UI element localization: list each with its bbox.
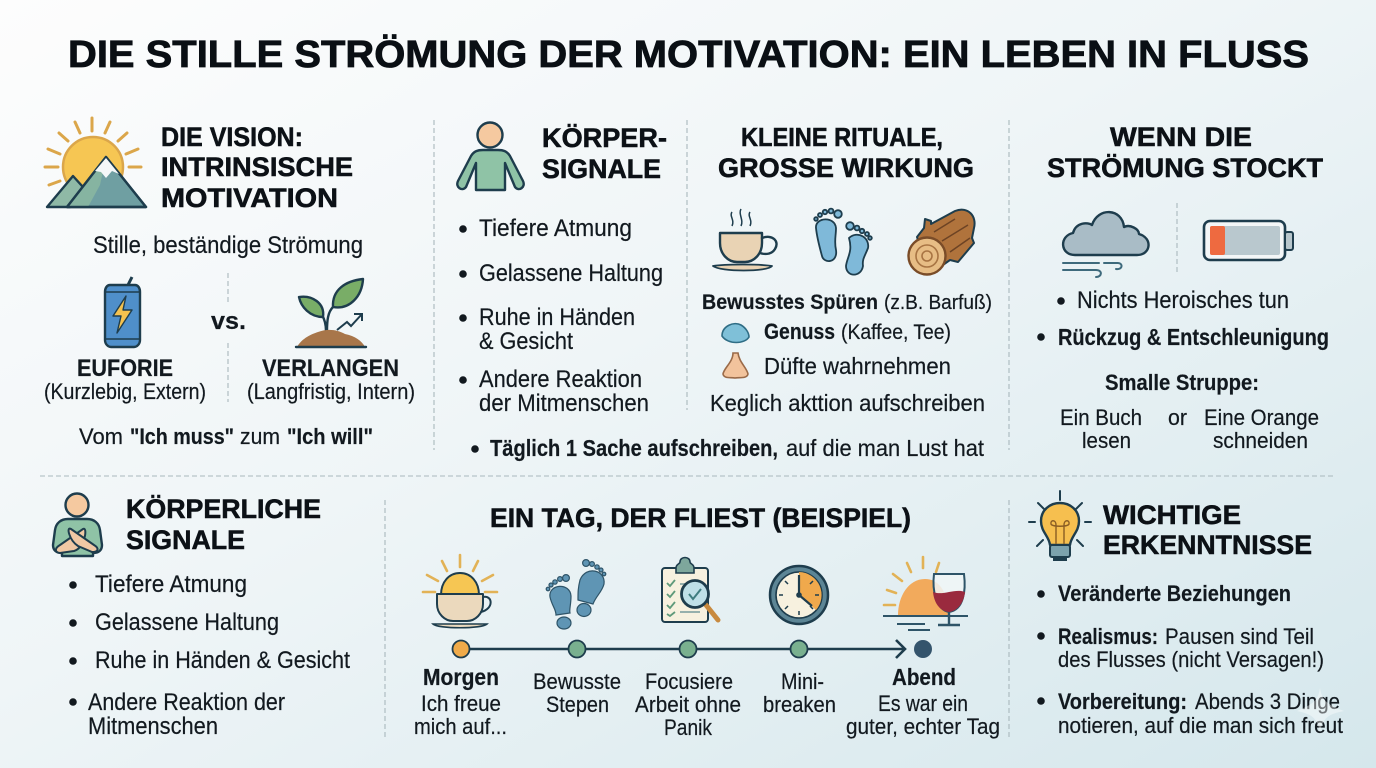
comparison: euforie: [44, 355, 206, 404]
insight: realismus: [1037, 624, 1324, 672]
heading: die vision: MOTIVATION: [161, 183, 338, 213]
subtitle: Stille, beständige Strömung: [93, 232, 363, 259]
bullet list: signals: Tiefere Atmung: [479, 215, 632, 242]
icon: light bulb: [1029, 491, 1091, 560]
heading: kleine rituale: KLEINE RITUALE,: [741, 122, 943, 152]
insight: vorbereitung: Abends 3 Dinge: [1195, 689, 1340, 714]
bullet list: signals: Ruhe in Händen: [479, 304, 635, 331]
step: morgen: Morgen: [423, 664, 499, 690]
icon: coffee cup: [713, 209, 777, 270]
comparison: verlangen: (Langfristig, Intern): [247, 379, 415, 404]
icon: low battery: [1204, 221, 1293, 260]
title: DIE STILLE STRÖMUNG DER MOTIVATION: EIN LEBEN IN FLUSS: [68, 33, 1309, 76]
heading: körpersignale: KÖRPER-: [542, 123, 667, 153]
panel: wenn die strömung stockt: [1037, 122, 1329, 453]
bullet list: rückzug: [1037, 287, 1329, 350]
panel: ein tag timeline: [414, 503, 1000, 740]
icon: shell: [722, 324, 749, 342]
icon: standing person: [457, 122, 524, 190]
heading: strömung stockt: STRÖMUNG STOCKT: [1047, 153, 1324, 183]
step: fokus arbeit: Arbeit ohne: [635, 692, 741, 717]
icon: sunset and wine glass: [883, 557, 968, 630]
closing line: "Ich will": [287, 424, 373, 449]
bullet list: signals: Gelassene Haltung: [479, 260, 663, 287]
heading: körperliche signale: KÖRPERLICHE: [126, 494, 321, 524]
vs label: vs.: [211, 308, 246, 335]
step: fokus arbeit: [635, 669, 741, 740]
insight: vorbereitung: Vorbereitung:: [1058, 689, 1187, 714]
ritual: genuss: Genuss: [764, 319, 835, 344]
panel: die vision: [44, 118, 415, 449]
heading: körpersignale: SIGNALE: [542, 154, 661, 184]
insight: realismus: Pausen sind Teil: [1165, 624, 1314, 649]
ritual: düfte: Düfte wahrnehmen: [764, 353, 951, 379]
heading: wichtige erkenntnisse: ERKENNTNISSE: [1103, 530, 1312, 560]
ritual: aufschreiben: Keglich akttion aufschreiben: [710, 390, 985, 416]
bullet list: körperliche signale: [69, 571, 350, 740]
options: buch or orange: Eine Orange: [1204, 405, 1319, 430]
bullet list: körperliche signale: Mitmenschen: [88, 713, 218, 740]
panel: körperliche signale: [53, 494, 350, 740]
insight: realismus: des Flusses (nicht Versagen!): [1058, 647, 1324, 672]
bullet list: körperliche signale: Ruhe in Händen & Gesicht: [95, 647, 350, 674]
ritual: genuss: [764, 319, 951, 344]
heading: wichtige erkenntnisse: WICHTIGE: [1103, 500, 1241, 530]
heading: die vision: INTRINSISCHE: [161, 152, 353, 182]
bullet list: signals: Andere Reaktion: [479, 366, 642, 393]
heading: wichtige erkenntnisse: [1103, 500, 1312, 560]
step: abend: Es war ein: [878, 691, 968, 716]
heading: ein tag: EIN TAG, DER FLIEST (BEISPIEL): [490, 503, 911, 533]
icon: energy can: [105, 277, 140, 347]
step: bewusste stepen: [533, 669, 621, 717]
callout: täglich 1 sache: [471, 435, 985, 461]
closing line: [79, 424, 373, 449]
step: abend: Abend: [892, 664, 956, 690]
bullet list: rückzug: Rückzug & Entschleunigung: [1058, 324, 1329, 350]
bullet list: körperliche signale: Tiefere Atmung: [95, 571, 247, 598]
step: morgen: [414, 664, 507, 739]
icon: sun and mountains: [45, 118, 146, 207]
heading: strömung stockt: WENN DIE: [1110, 122, 1252, 152]
sub-heading: smalle struppe: Smalle Struppe:: [1105, 370, 1259, 395]
closing line: zum: [240, 424, 280, 449]
ritual: bewusstes spüren: [702, 290, 992, 314]
timeline arrow with stops: [452, 640, 932, 658]
bullet list: signals: [459, 215, 663, 417]
options: buch or orange: lesen: [1082, 428, 1131, 453]
step: bewusste stepen: Bewusste: [533, 669, 621, 694]
icon: morning sun and cup: [423, 555, 497, 628]
step: mini-breaken: [763, 669, 836, 717]
icon: wooden log: [908, 210, 975, 274]
ritual: bewusstes spüren: (z.B. Barfuß): [884, 292, 992, 314]
heading: kleine rituale: GROSSE WIRKUNG: [718, 153, 974, 183]
icon: footprints: [546, 560, 606, 629]
comparison: verlangen: VERLANGEN: [262, 355, 399, 382]
insight: beziehungen: Veränderte Beziehungen: [1058, 581, 1291, 606]
bullet list: körperliche signale: Andere Reaktion der: [88, 689, 285, 716]
bullet list: rückzug: Nichts Heroisches tun: [1077, 287, 1289, 314]
heading: körperliche signale: [126, 494, 321, 555]
insight: vorbereitung: [1037, 689, 1344, 738]
bullet list: signals: der Mitmenschen: [479, 390, 649, 417]
comparison: euforie: (Kurzlebig, Extern): [44, 379, 206, 404]
icon: bare feet: [814, 209, 872, 275]
options: buch or orange: Ein Buch: [1060, 405, 1142, 430]
icon: cloud and wind: [1063, 212, 1149, 277]
options: buch or orange: [1060, 405, 1319, 453]
panel: körpersignale: [457, 122, 667, 417]
step: mini-breaken: breaken: [763, 692, 836, 717]
step: abend: guter, echter Tag: [846, 714, 1000, 739]
closing line: "Ich muss": [130, 424, 234, 449]
heading: körpersignale: [542, 123, 667, 184]
options: buch or orange: or: [1168, 405, 1187, 430]
step: abend: [846, 664, 1000, 739]
step: fokus arbeit: Panik: [664, 715, 713, 740]
bullet list: körperliche signale: Gelassene Haltung: [95, 609, 279, 636]
insight: realismus: Realismus:: [1058, 624, 1158, 649]
insight: vorbereitung: notieren, auf die man sich freut: [1058, 713, 1344, 738]
comparison: euforie: EUFORIE: [77, 355, 173, 382]
icon: clipboard with magnifier: [662, 558, 718, 622]
panel: kleine rituale: [702, 122, 992, 416]
panel: wichtige erkenntnisse: [1029, 491, 1344, 738]
heading: die vision: DIE VISION:: [161, 122, 303, 152]
icon: person with crossed arms: [53, 494, 102, 556]
comparison: verlangen: [247, 355, 415, 404]
ritual: bewusstes spüren: Bewusstes Spüren: [702, 290, 878, 314]
step: morgen: mich auf...: [414, 714, 507, 739]
callout: täglich 1 sache: auf die man Lust hat: [786, 435, 985, 461]
step: mini-breaken: Mini-: [781, 669, 824, 694]
icon: clock: [770, 566, 828, 624]
options: buch or orange: schneiden: [1213, 428, 1308, 453]
callout: täglich 1 sache: Täglich 1 Sache aufschreiben,: [490, 435, 778, 461]
closing line: Vom: [79, 424, 123, 449]
icon: nose: [723, 353, 748, 378]
heading: kleine rituale: [718, 122, 974, 183]
step: fokus arbeit: Focusiere: [645, 669, 733, 694]
ritual: genuss: (Kaffee, Tee): [841, 320, 951, 344]
heading: die vision: [161, 122, 353, 213]
heading: körperliche signale: SIGNALE: [126, 525, 245, 555]
icon: seedling with arrow: [296, 279, 366, 347]
step: morgen: Ich freue: [421, 691, 501, 716]
heading: strömung stockt: [1047, 122, 1324, 183]
bullet list: signals: & Gesicht: [479, 328, 573, 355]
step: bewusste stepen: Stepen: [546, 692, 609, 717]
